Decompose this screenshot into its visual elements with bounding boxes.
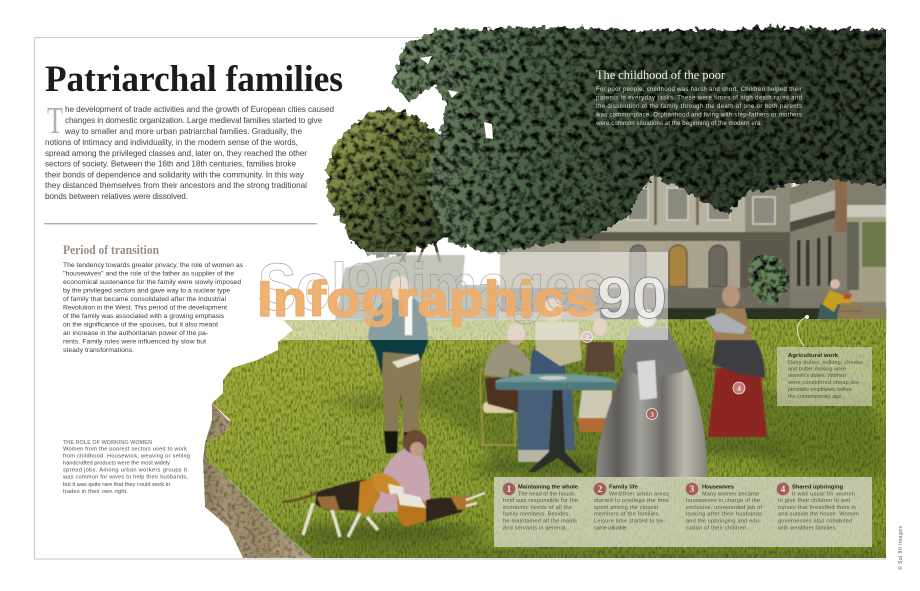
caption 3: exclusive, unrewarded job of: [686, 505, 762, 511]
upper windows: [628, 188, 775, 224]
body text: were common situations at the beginning of the modern era.: [595, 121, 762, 127]
caption 4: and outside the house. Women: [778, 512, 859, 518]
marker 4: 4: [737, 384, 741, 393]
image credit: © Sol 90 Images: [897, 526, 904, 570]
caption 2: Family life: [609, 484, 639, 490]
text block: period of transition: [63, 262, 244, 354]
body text: For poor people, childhood was harsh and short. Children helped their: [596, 87, 802, 93]
caption 4: Shared upbringing: [792, 484, 843, 490]
intro text block: bonds between relatives were dissolved.: [45, 192, 188, 201]
right wing: [790, 172, 886, 320]
text block: period of transition: steady transformations.: [63, 347, 134, 354]
foliage gaps: [420, 56, 493, 139]
torso: [484, 342, 540, 378]
caption 1: [503, 483, 579, 532]
table: [495, 374, 617, 473]
caption 3: looking after their husbands: [686, 512, 762, 518]
intro text block: spread among the privileged classes and, later on, they reached the other: [45, 149, 307, 158]
caption 2: came valuable.: [594, 526, 628, 532]
text block: period of transition: an increase in the authoritarian power of the pa-: [63, 330, 208, 337]
body: the contemporary age.: [788, 394, 843, 400]
body text: parents in everyday tasks. These were times of high death rates and: [596, 96, 802, 102]
dirt cross-section: [203, 403, 312, 558]
caption 3: and the upbringing and edu-: [686, 518, 761, 524]
figure: woman in blue behind table: [518, 298, 582, 462]
caption 3: Housewives: [702, 484, 734, 490]
text block: working women: handcrafted products were the most widely: [63, 460, 170, 466]
caption 1: and servants in general.: [503, 526, 567, 532]
text block: period of transition: of the family was associated with a growing emphasis: [63, 313, 225, 320]
background trees behind the lawn: [335, 228, 500, 320]
caption 2: 2: [598, 484, 603, 494]
body: women's duties. Women: [787, 373, 846, 379]
lawn shadows: [270, 350, 890, 570]
intro text block: changes in domestic organization. Large medieval families started to give: [65, 116, 322, 125]
caption 1: he maintained all the maids: [503, 518, 577, 524]
standing beagle: [282, 473, 404, 537]
caption 4: with wealthier families.: [777, 526, 837, 532]
caption 2: Leisure time started to be-: [594, 518, 665, 524]
marker 2: 2: [585, 333, 589, 342]
caption 4: nurses that breastfed them in: [778, 505, 856, 511]
caption 1: family members. Besides,: [503, 512, 570, 518]
text block: period of transition: on the significance of the spouses, but it also meant: [63, 322, 218, 329]
body: and butter-making were: [788, 367, 846, 373]
watermark number: 90: [597, 266, 667, 331]
lying beagle: [397, 492, 485, 527]
text block: working women: [62, 446, 190, 495]
body: were considered cheap dis-: [787, 380, 860, 386]
intro text block: [45, 100, 334, 201]
marker 3: [646, 408, 658, 420]
caption 2: members of the families.: [594, 512, 660, 518]
panel: agricultural work: [777, 347, 872, 406]
body: [787, 360, 863, 400]
arched windows: [630, 245, 727, 287]
caption 2: spent among the closest: [594, 505, 658, 511]
text block: period of transition: by the privileged sectors and gave way to a nuclear type: [63, 288, 230, 295]
caption 1: The head of the house-: [518, 492, 576, 498]
figure: girl with dogs: [282, 430, 485, 537]
caption 4: to give their children to wet: [778, 498, 850, 504]
marker 2: [582, 332, 592, 342]
barrel: [839, 303, 863, 333]
panel: numbered captions: [494, 477, 872, 547]
caption 1: 1: [507, 484, 512, 494]
text block: working women: was common for wives to help their husbands,: [62, 474, 188, 480]
intro text block: their bonds of dependence and solidarity with the community. In this way: [45, 170, 305, 180]
round tree: [327, 109, 465, 257]
lawn: [205, 319, 886, 558]
figure: mother in crinoline dress: [596, 309, 707, 478]
body text: was commonplace. Orphanhood and living with step-fathers or mothers: [595, 112, 802, 118]
figure: father: [368, 276, 428, 453]
intro text block: they distanced themselves from their ancestors and the strong traditional: [45, 181, 307, 190]
arrow: agricultural callout leader: [797, 315, 809, 346]
caption 3: Many women became: [702, 492, 759, 498]
building facade: [500, 170, 886, 320]
text block: period of transition: Revolution in the West. This period of the development: [63, 304, 227, 312]
text block: period of transition: The tendency towards greater privacy, the role of women as: [63, 262, 244, 269]
caption 2: started to privilege the time: [594, 498, 669, 504]
main wing: [500, 175, 792, 320]
drop cap: T: [47, 100, 63, 142]
text block: working women: from childhood. Housework, weaving or selling: [63, 454, 190, 460]
caption 2: Wealthier urban areas: [609, 492, 669, 498]
marker 4: [733, 382, 745, 394]
caption 3: cation of their children.: [686, 526, 748, 532]
watermark panel: [257, 250, 668, 340]
panel: childhood of the poor: [595, 68, 802, 127]
tree foliage canopy: [392, 27, 895, 254]
caption 2: [594, 483, 669, 532]
hedge: [600, 308, 830, 320]
text block: period of transition: "housewives" and the role of the father as supplier of the: [63, 271, 234, 278]
caption 1: economic needs of all the: [503, 505, 572, 511]
title: Patriarchal families: [45, 59, 343, 100]
heading: The childhood of the poor: [596, 68, 726, 82]
watermark outline logo: Sol90images: [258, 250, 608, 325]
intro text block: sectors of society. Between the 16th and 18th centuries, families broke: [45, 160, 296, 168]
caption 3: 3: [690, 484, 695, 494]
figure: nurse in red skirt: [705, 285, 767, 437]
text block: working women: spread jobs. Among urban workers groups it: [63, 468, 187, 474]
farm woman at barrel: [815, 279, 886, 333]
legs: [485, 377, 538, 432]
text block: working women: trades in their own right.: [63, 489, 128, 495]
caption 3: housewives in charge of the: [686, 498, 760, 504]
caption 4: [777, 483, 859, 532]
body: Dairy duties, milking, cheese: [788, 360, 863, 366]
text block: period of transition: economical sustenance for the family were slowly imposed: [63, 279, 241, 286]
caption 4: 4: [781, 484, 786, 494]
intro text block: he development of trade activities and the growth of European cities caused: [65, 105, 334, 114]
text block: period of transition: rents. Family roles were influenced by slow but: [63, 339, 206, 346]
body: pensable employees before: [788, 387, 852, 393]
shrub: [749, 254, 788, 304]
caption 4: It was usual for women: [792, 492, 855, 498]
text block: working women: but it was quite rare that they could work in: [63, 482, 170, 488]
heading: Agricultural work: [788, 353, 839, 359]
marker 3: 3: [650, 410, 654, 419]
caption 4: governesses also cohabited: [778, 518, 852, 524]
figure: seated woman with chair: [480, 323, 541, 447]
intro text block: way to smaller and more urban patriarchal families. Gradually, the: [64, 127, 302, 136]
figure: girl behind table: [578, 318, 615, 432]
caption 3: [686, 483, 762, 532]
body text: [595, 87, 802, 127]
illustration: garden scene: [203, 27, 895, 570]
watermark orange wordmark: Infographics: [257, 271, 597, 327]
caption 1: hold was responsible for the: [503, 498, 578, 504]
caption 1: Maintaining the whole: [518, 484, 579, 490]
body text: the dissolution of the family through the death of one or both parents: [596, 104, 802, 110]
heading: period of transition: Period of transition: [63, 243, 159, 257]
intro text block: notions of intimacy and individuality, in the modern sense of the words,: [45, 138, 298, 147]
heading: role of working women: THE ROLE OF WORKING WOMEN: [63, 440, 152, 446]
text block: period of transition: of family that became consolidated after the Industrial: [63, 296, 226, 303]
text block: working women: Women from the poorest sectors used to work: [63, 446, 187, 452]
chair: [480, 367, 516, 447]
